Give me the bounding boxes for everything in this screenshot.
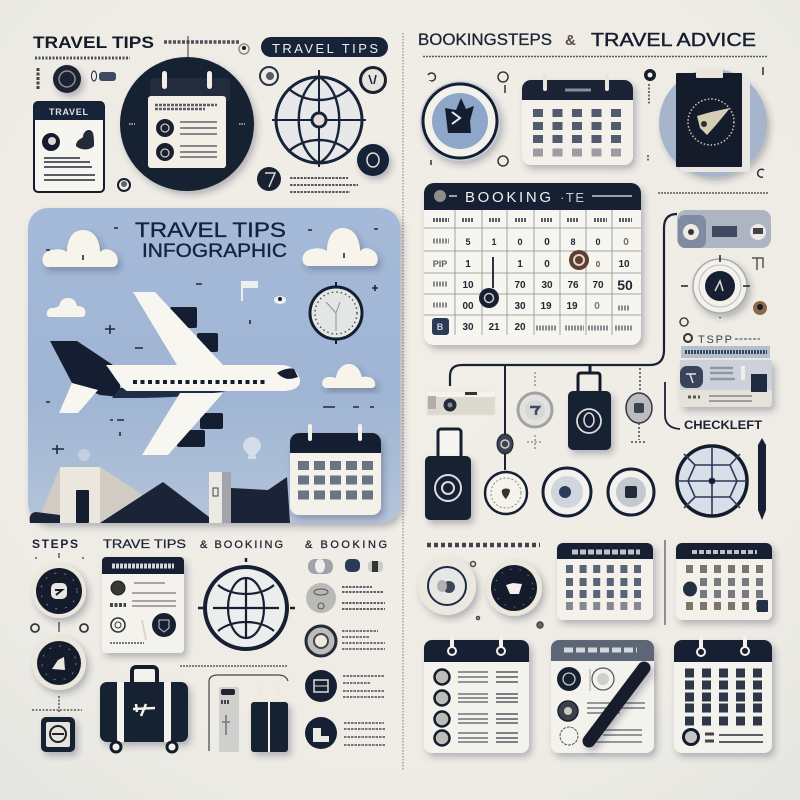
icon: dial <box>681 255 763 318</box>
icon: ring top right of globe <box>360 68 386 92</box>
icon: knob <box>38 65 81 93</box>
mountains <box>30 477 290 523</box>
heading: booking steps: BOOKINGSTEPS <box>418 30 552 49</box>
vertical marker <box>664 540 666 625</box>
badge: travel tips pill: TRAVEL TIPS <box>272 41 378 56</box>
date numbers: 70 <box>592 280 604 291</box>
date numbers: 0 <box>596 260 601 269</box>
caption line under heading <box>35 56 130 60</box>
icon: grey capsule <box>626 368 652 442</box>
cloud: small left <box>47 298 85 317</box>
date numbers: 5 <box>465 237 471 247</box>
icon: suitcase with plane <box>100 667 188 752</box>
date numbers: 30 <box>541 280 553 291</box>
icon: navy ring s <box>608 469 654 515</box>
pen <box>589 668 644 741</box>
date numbers: 1 <box>465 259 471 270</box>
flag <box>241 281 286 304</box>
caption: lower right <box>427 543 540 547</box>
airplane <box>50 292 300 455</box>
calendar <box>290 424 381 515</box>
date numbers: 19 <box>566 301 578 312</box>
card: notes with pen <box>551 640 654 753</box>
icon: dark circle bottom right <box>357 144 389 176</box>
icon: suitcase <box>425 429 471 520</box>
card: booking details <box>102 557 184 653</box>
cloud: top left <box>42 230 118 267</box>
dashed caption <box>180 665 288 667</box>
icon: toggle <box>92 71 116 81</box>
icon: dial two <box>32 636 86 690</box>
panel: hero travel tips infographic <box>28 208 400 523</box>
calendar: lower a <box>557 543 653 620</box>
icon: bronze pin <box>680 301 767 326</box>
icon: pen <box>758 438 766 520</box>
calendar: month grid <box>522 73 633 165</box>
date numbers: 21 <box>488 322 500 333</box>
date numbers: 0 <box>544 237 550 248</box>
icon: small marks around compass <box>428 72 508 166</box>
icon: pin near passport <box>644 67 764 177</box>
date numbers: 00 <box>462 301 474 312</box>
icon: square knob <box>41 717 75 752</box>
date numbers: 50 <box>617 277 633 293</box>
small marks <box>470 562 543 628</box>
date numbers: 8 <box>570 237 576 247</box>
icon tray <box>677 210 771 248</box>
scattered marks <box>46 228 378 454</box>
strip: blue caption <box>681 346 770 358</box>
label: checklist: CHECKLEFT <box>684 418 763 432</box>
rule under heading <box>423 56 768 58</box>
balloon <box>243 437 261 459</box>
list item three <box>305 670 385 702</box>
label: tips: TSPP <box>698 334 732 346</box>
date numbers: 1 <box>491 237 497 247</box>
icon: ring top left of globe <box>260 67 278 85</box>
tower <box>209 472 231 523</box>
hero title <box>135 219 287 262</box>
icon: grey ring <box>518 372 552 450</box>
caption line <box>658 192 768 194</box>
list item two <box>306 626 385 656</box>
icon: navy ring <box>543 468 591 516</box>
date numbers: 0 <box>594 301 600 312</box>
date numbers: 0 <box>595 237 601 247</box>
icon: luggage tag <box>568 364 611 450</box>
icon: dial one <box>32 564 86 618</box>
hero title: INFOGRAPHIC <box>142 241 287 262</box>
calendar: lower b <box>676 543 772 620</box>
date numbers: 30 <box>462 322 474 333</box>
section labels: lower left <box>32 537 387 551</box>
grid lines <box>424 210 641 335</box>
icon: small oval <box>118 179 130 191</box>
calendar: booking steps: B <box>437 322 444 332</box>
card: travel list <box>34 102 104 192</box>
tag strip <box>427 392 495 415</box>
calendar: booking steps: ·TE <box>560 190 584 205</box>
branch line with node <box>497 366 513 470</box>
section labels: lower left: & BOOKIING <box>200 539 283 551</box>
icon: compass badge <box>420 81 500 161</box>
cloud: top right <box>302 228 378 266</box>
connector under dial <box>32 696 82 712</box>
center divider <box>402 33 404 770</box>
icon: small pin <box>239 44 249 54</box>
card: tips <box>680 360 772 407</box>
ampersand: & <box>565 32 576 49</box>
connector line <box>450 214 677 386</box>
small ring pair <box>31 553 88 632</box>
list item four <box>305 717 385 749</box>
building <box>37 449 157 523</box>
date numbers: 0 <box>517 237 523 247</box>
icon: dial with box <box>486 560 542 616</box>
icon: calendar on dark circle <box>120 36 254 191</box>
day labels <box>433 218 632 222</box>
calendar: lower c <box>674 636 772 753</box>
card: checklist <box>424 636 529 753</box>
section labels: lower left: TRAVE TIPS <box>103 537 186 551</box>
icon: bottle and bag frame <box>209 675 288 752</box>
date numbers: 0 <box>544 259 550 270</box>
icon: stamp ring <box>485 472 527 514</box>
date numbers: 70 <box>514 280 526 291</box>
bracket <box>665 382 680 429</box>
label: tips <box>684 334 760 346</box>
section labels: lower left: STEPS <box>32 537 78 551</box>
date numbers: 1 <box>517 259 523 270</box>
date numbers: 19 <box>540 301 552 312</box>
calendar: booking steps <box>424 183 641 345</box>
marker: navy knob <box>479 257 499 308</box>
date numbers: PIP <box>433 259 447 269</box>
badge: travel tips pill <box>261 37 388 57</box>
heading: travel advice: TRAVEL ADVICE <box>591 30 756 50</box>
top pills: lower right column <box>308 559 383 574</box>
date numbers: 0 <box>623 237 629 248</box>
icon: lower globe <box>198 558 295 649</box>
date numbers: 30 <box>514 301 526 312</box>
icon: round map <box>677 446 747 516</box>
date numbers: 10 <box>462 280 474 291</box>
calendar: booking steps: BOOKING <box>465 189 551 206</box>
icon: passport <box>659 69 767 177</box>
date numbers: 20 <box>514 322 526 333</box>
caption line beside heading <box>164 40 240 44</box>
clock <box>310 282 362 344</box>
marker: brown token <box>569 250 589 270</box>
hero title: TRAVEL TIPS <box>135 219 286 242</box>
row labels and faded cells <box>433 241 632 328</box>
icon: camera lens <box>418 557 476 615</box>
date numbers: 76 <box>567 280 579 291</box>
icon: dark circle bottom left with text <box>257 167 358 192</box>
date numbers <box>433 237 633 333</box>
cloud: small right <box>322 364 375 388</box>
section labels: lower left: & BOOKING <box>305 539 387 551</box>
date numbers: 10 <box>618 259 630 270</box>
card: travel list: TRAVEL <box>49 107 88 117</box>
heading: travel tips: TRAVEL TIPS <box>33 33 154 52</box>
list item one <box>306 583 385 613</box>
icon: globe <box>272 70 366 167</box>
